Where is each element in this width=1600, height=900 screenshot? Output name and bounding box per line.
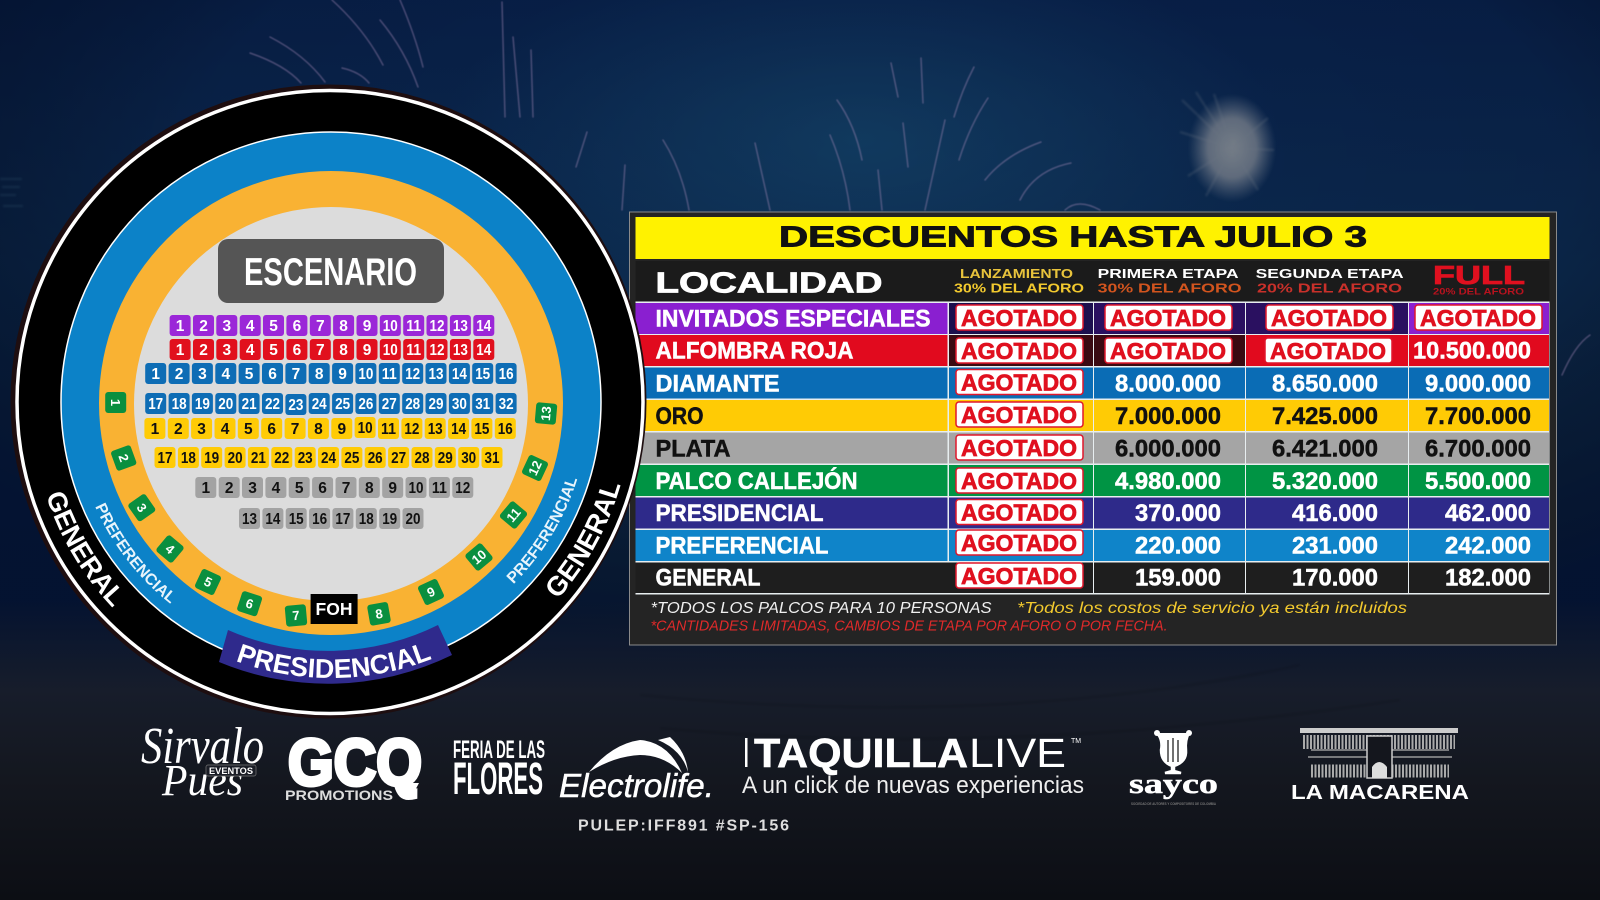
- sold out badges: AGOTADO: [1110, 338, 1226, 364]
- prices: segunda etapa: 6.421.000: [1272, 436, 1378, 462]
- seats: oro row 2: 17: [158, 450, 172, 467]
- seats: plata row 2: 20: [406, 511, 420, 528]
- seats: diamante row 2: 19: [195, 396, 210, 413]
- seats: diamante row 2: 26: [358, 396, 374, 413]
- seats: oro row 2: 20: [228, 450, 243, 467]
- seats: plata row 2: 14: [265, 511, 281, 528]
- seats: plata row 1: 3: [248, 480, 257, 497]
- sold out badges: AGOTADO: [1271, 305, 1387, 331]
- prices: primera etapa: 6.000.000: [1115, 436, 1221, 462]
- palcos: numbered green boxes: 10: [469, 547, 489, 567]
- palcos: numbered green boxes: 7: [292, 608, 300, 623]
- prices: segunda etapa: 5.320.000: [1272, 468, 1378, 495]
- header row: 20% DEL AFORO: [1433, 286, 1524, 296]
- sold out badges: AGOTADO: [961, 305, 1077, 331]
- ring: palco callejon: [99, 171, 563, 635]
- palcos: numbered green boxes: 8: [374, 606, 384, 622]
- seats: alfombra roja row: 8: [339, 342, 348, 359]
- header row: PRIMERA ETAPA: [1098, 266, 1239, 281]
- footnotes: [651, 600, 1407, 634]
- sold out badges: AGOTADO: [1270, 338, 1386, 364]
- sold out badges: AGOTADO: [961, 370, 1077, 396]
- prices: full: [1413, 338, 1531, 592]
- seats: diamante row 2: 29: [428, 396, 444, 413]
- logo: sayco: [1129, 730, 1218, 806]
- prices: segunda etapa: 8.650.000: [1272, 370, 1378, 398]
- seats: diamante row 1: [145, 363, 517, 384]
- seats: alfombra roja row: 12: [430, 342, 444, 359]
- seats: invitados especiales row: 7: [316, 318, 325, 335]
- seats: alfombra roja row: 4: [246, 342, 255, 359]
- palcos: numbered green boxes: 6: [244, 595, 255, 612]
- seats: diamante row 1: 10: [358, 366, 373, 383]
- logo: taquilla live: LIVE: [969, 730, 1066, 776]
- prices: segunda etapa: [1272, 370, 1378, 592]
- seats: oro row 2: 22: [274, 450, 289, 467]
- logo: gcq promotions: PROMOTIONS: [285, 787, 393, 803]
- seats: oro row 2: 29: [438, 450, 453, 467]
- logo: sirvalo pues eventos: Pues: [161, 756, 243, 805]
- seats: diamante row 1: 4: [221, 366, 230, 383]
- prices: primera etapa: 159.000: [1135, 565, 1221, 592]
- sold out badges: AGOTADO: [1110, 305, 1226, 331]
- seats: oro row 2: 23: [298, 450, 313, 467]
- seats: oro row 2: 27: [391, 450, 406, 467]
- panel: seating map: [10, 84, 674, 759]
- seats: oro row 1: 11: [381, 421, 396, 438]
- palcos: numbered green boxes: 5: [202, 574, 214, 590]
- table background: [630, 212, 1556, 645]
- prices: full: 6.700.000: [1425, 436, 1531, 462]
- seats: invitados especiales row: 3: [222, 318, 231, 335]
- seats: plata row 1: [195, 477, 473, 498]
- seats: alfombra roja row: 3: [222, 342, 231, 359]
- floor: gray centre: [134, 207, 528, 601]
- logo: sirvalo pues eventos: EVENTOS: [209, 766, 253, 776]
- logo: taquilla live: TAQUILLA: [754, 730, 968, 776]
- seats: alfombra roja row: 6: [293, 342, 302, 359]
- seats: diamante row 1: 11: [382, 366, 397, 383]
- label: general left: GENERAL: [48, 492, 120, 608]
- seats: oro row 1: 2: [174, 421, 183, 438]
- seats: alfombra roja row: 13: [453, 342, 468, 359]
- palcos: numbered green boxes: 3: [134, 500, 150, 515]
- logo: feria de las flores: [453, 736, 545, 804]
- seats: oro row 1: 3: [197, 421, 206, 438]
- seats: diamante row 2: 18: [172, 396, 187, 413]
- ring: outer edge: [10, 84, 646, 718]
- seats: diamante row 1: 12: [405, 366, 420, 383]
- row labels: DIAMANTE: [656, 370, 780, 398]
- banner: presidencial: [219, 625, 452, 684]
- seats: oro row 1: 8: [314, 421, 323, 438]
- row labels: INVITADOS ESPECIALES: [656, 306, 930, 333]
- seats: diamante row 1: 5: [245, 366, 254, 383]
- seats: diamante row 2: 21: [242, 396, 257, 413]
- seats: plata row 1: 2: [225, 480, 234, 497]
- seats: oro row 1: 5: [244, 421, 253, 438]
- prices: full: 182.000: [1445, 565, 1531, 592]
- row labels: PREFERENCIAL: [656, 532, 829, 560]
- sold out badges: AGOTADO: [961, 435, 1077, 461]
- prices: full: 7.700.000: [1425, 403, 1531, 430]
- ring: preferencial zone: [61, 132, 601, 672]
- seats: diamante row 1: 1: [151, 366, 160, 383]
- seats: diamante row 2: 31: [475, 396, 491, 413]
- header row: 30% DEL AFORO: [954, 281, 1084, 296]
- footnotes: *CANTIDADES LIMITADAS, CAMBIOS DE ETAPA POR AFORO O POR FECHA.: [651, 618, 1168, 634]
- row labels: [656, 306, 930, 592]
- seats: oro row 2: 28: [414, 450, 430, 467]
- seats: plata row 1: 11: [432, 480, 447, 497]
- seats: oro row 1: 9: [337, 421, 346, 438]
- seats: oro row 1: [144, 417, 516, 439]
- seats: invitados especiales row: 9: [363, 318, 372, 335]
- logo: electrolife: [559, 737, 714, 804]
- seats: oro row 2: 30: [461, 450, 476, 467]
- palcos: numbered green boxes: [105, 392, 557, 627]
- seats: plata row 1: 5: [295, 480, 304, 497]
- label: general right: GENERAL: [547, 484, 620, 596]
- seats: oro row 1: 13: [428, 421, 443, 438]
- heading: descuentos: [636, 217, 1550, 259]
- row labels: PALCO CALLEJÓN: [656, 467, 858, 495]
- header row: LOCALIDAD: [656, 268, 882, 300]
- logo: taquilla live: [742, 730, 1084, 799]
- seats: diamante row 2: 24: [312, 396, 327, 413]
- label: preferencial right: PREFERENCIAL: [506, 478, 578, 584]
- logo: sayco: SOCIEDAD DE AUTORES Y COMPOSITORES DE COLOMBIA: [1131, 802, 1216, 806]
- seats: diamante row 2: 28: [405, 396, 421, 413]
- seats: plata row 2: [239, 508, 424, 529]
- seats: invitados especiales row: 2: [199, 318, 208, 335]
- prices: primera etapa: 8.000.000: [1115, 370, 1221, 398]
- seats: diamante row 1: 6: [268, 366, 277, 383]
- seats: plata row 1: 7: [342, 480, 350, 497]
- footnotes: *TODOS LOS PALCOS PARA 10 PERSONAS: [651, 600, 992, 617]
- seats: diamante row 2: 23: [288, 397, 304, 414]
- seats: invitados especiales row: [170, 315, 494, 336]
- seats: plata row 1: 6: [318, 480, 327, 497]
- label: preferencial left: PREFERENCIAL: [96, 502, 173, 604]
- seats: diamante row 1: 15: [475, 366, 491, 383]
- seats: plata row 1: 8: [365, 480, 374, 497]
- banner: presidencial: PRESIDENCIAL: [237, 644, 432, 678]
- seats: alfombra roja row: 10: [383, 342, 398, 359]
- prices: full: 242.000: [1445, 532, 1531, 560]
- seats: diamante row 1: 13: [428, 366, 444, 383]
- seats: invitados especiales row: 6: [293, 318, 302, 335]
- logo: feria de las flores: FLORES: [453, 753, 543, 804]
- foh: front of house box: FOH: [316, 599, 352, 619]
- header row: 30% DEL AFORO: [1098, 281, 1242, 296]
- seats: invitados especiales row: 10: [383, 318, 398, 335]
- sold out badges: AGOTADO: [961, 530, 1077, 556]
- row labels: PLATA: [656, 436, 731, 462]
- seats: plata row 2: 18: [359, 511, 374, 528]
- seats: alfombra roja row: [170, 339, 494, 360]
- seats: alfombra roja row: 11: [406, 342, 422, 359]
- seats: diamante row 2: 30: [452, 396, 467, 413]
- seats: oro row 1: 1: [151, 421, 160, 438]
- seats: oro row 1: 7: [291, 421, 299, 438]
- seats: plata row 2: 17: [335, 511, 350, 528]
- seats: oro row 1: 12: [404, 421, 419, 438]
- logo: sirvalo pues eventos: [141, 718, 264, 805]
- seats: diamante row 2: 25: [335, 396, 350, 413]
- header row: FULL: [1433, 260, 1525, 290]
- footnotes: *Todos los costos de servicio ya están incluidos: [1017, 600, 1407, 617]
- seats: diamante row 1: 9: [338, 366, 347, 383]
- seats: alfombra roja row: 7: [316, 342, 325, 359]
- seats: invitados especiales row: 4: [246, 318, 255, 335]
- prices: segunda etapa: 416.000: [1292, 500, 1378, 527]
- palcos: numbered green boxes: 12: [525, 458, 545, 478]
- seats: oro row 2: 18: [181, 450, 196, 467]
- prices: full: 462.000: [1445, 500, 1531, 527]
- sold out badges: AGOTADO: [961, 468, 1077, 494]
- ring: general zone: [17, 90, 643, 714]
- prices: primera etapa: [1115, 370, 1221, 592]
- row labels: ORO: [656, 403, 704, 430]
- seats: invitados especiales row: 8: [339, 318, 348, 335]
- sold out badges: AGOTADO: [1420, 305, 1536, 331]
- seats: plata row 1: 1: [201, 480, 210, 497]
- seats: alfombra roja row: 2: [199, 342, 208, 359]
- seats: diamante row 2: 20: [218, 396, 233, 413]
- seats: plata row 1: 10: [408, 480, 424, 497]
- seats: diamante row 1: 3: [198, 366, 207, 383]
- seats: plata row 1: 12: [455, 480, 470, 497]
- prices: full: 9.000.000: [1425, 370, 1531, 398]
- prices: full: 10.500.000: [1413, 338, 1531, 364]
- seats: alfombra roja row: 9: [363, 342, 372, 359]
- seats: diamante row 2: 27: [382, 396, 397, 413]
- seats: plata row 2: 13: [242, 511, 257, 528]
- prices: segunda etapa: 231.000: [1292, 532, 1378, 560]
- seats: oro row 2: 26: [368, 450, 383, 467]
- logo: sirvalo pues eventos: Sirvalo: [141, 718, 264, 775]
- seats: invitados especiales row: 5: [269, 318, 278, 335]
- header row: 20% DEL AFORO: [1257, 281, 1402, 296]
- seats: diamante row 2: 22: [265, 396, 280, 413]
- sold out badges: AGOTADO: [961, 402, 1077, 428]
- logo: sayco: sayco: [1129, 768, 1218, 800]
- seats: oro row 1: 14: [451, 421, 466, 438]
- seats: diamante row 1: 7: [292, 366, 300, 383]
- logo: taquilla live: TM: [1071, 738, 1081, 745]
- palcos: numbered green boxes: 9: [425, 584, 437, 600]
- seats: oro row 1: 4: [221, 421, 230, 438]
- panel: price table: [630, 212, 1556, 645]
- seats: invitados especiales row: 13: [453, 318, 468, 335]
- row labels: GENERAL: [656, 565, 761, 592]
- sold out badges: [956, 305, 1542, 589]
- logo: taquilla live: A un click de nuevas experiencias: [742, 772, 1084, 799]
- seats: diamante row 2: 17: [148, 396, 163, 413]
- seats: oro row 2: 31: [484, 450, 500, 467]
- prices: segunda etapa: 7.425.000: [1272, 403, 1378, 430]
- row labels: PRESIDENCIAL: [656, 500, 824, 527]
- seats: alfombra roja row: 1: [176, 342, 185, 359]
- prices: primera etapa: 220.000: [1135, 532, 1221, 560]
- seats: diamante row 1: 8: [315, 366, 324, 383]
- prices: full: 5.500.000: [1425, 468, 1531, 495]
- header row: LANZAMIENTO: [960, 266, 1073, 281]
- seats: diamante row 1: 14: [452, 366, 467, 383]
- seats: plata row 1: 4: [272, 480, 281, 497]
- sold out badges: AGOTADO: [961, 338, 1077, 364]
- seats: oro row 2: 19: [204, 450, 220, 467]
- stage: escenario: ESCENARIO: [244, 251, 417, 294]
- seats: invitados especiales row: 12: [430, 318, 444, 335]
- palcos: numbered green boxes: 2: [115, 452, 132, 464]
- seats: diamante row 1: 16: [499, 366, 514, 383]
- seats: plata row 2: 15: [289, 511, 304, 528]
- seats: invitados especiales row: 1: [176, 318, 185, 335]
- palcos: numbered green boxes: 11: [503, 505, 524, 525]
- logo: la macarena: [1291, 728, 1469, 804]
- seats: diamante row 1: 2: [175, 366, 183, 383]
- header row: [636, 260, 1550, 301]
- logo: la macarena: LA MACARENA: [1291, 782, 1469, 804]
- seats: oro row 1: 6: [267, 421, 276, 438]
- prices: primera etapa: 7.000.000: [1115, 403, 1221, 430]
- seats: diamante row 2: [145, 393, 517, 415]
- palcos: numbered green boxes: 4: [162, 541, 178, 558]
- prices: segunda etapa: 170.000: [1292, 565, 1378, 592]
- seats: oro row 1: 15: [474, 421, 490, 438]
- logo: gcq promotions: GCQ: [288, 725, 422, 799]
- heading: descuentos: DESCUENTOS HASTA JULIO 3: [779, 222, 1367, 254]
- seats: plata row 2: 16: [312, 511, 327, 528]
- seats: oro row 2: [154, 447, 502, 468]
- seats: alfombra roja row: 14: [476, 342, 492, 359]
- prices: primera etapa: 4.980.000: [1115, 468, 1221, 495]
- header row: SEGUNDA ETAPA: [1256, 266, 1404, 281]
- sold out badges: AGOTADO: [961, 563, 1077, 589]
- seats: plata row 1: 9: [388, 480, 397, 497]
- sold out badges: AGOTADO: [961, 500, 1077, 526]
- seats: diamante row 2: 32: [499, 396, 514, 413]
- row labels: ALFOMBRA ROJA: [656, 338, 854, 364]
- seats: oro row 2: 21: [251, 450, 266, 467]
- seats: oro row 1: 10: [358, 420, 373, 437]
- seats: oro row 1: 16: [498, 421, 513, 438]
- pulep code: PULEP:IFF891 #SP-156: [578, 818, 789, 834]
- palcos: numbered green boxes: 1: [108, 399, 123, 406]
- logo: feria de las flores: FERIA DE LAS: [453, 736, 545, 764]
- foh: front of house box: [311, 594, 358, 624]
- prices: primera etapa: 370.000: [1135, 500, 1221, 527]
- seats: invitados especiales row: 14: [476, 318, 492, 335]
- seats: oro row 2: 24: [321, 450, 336, 467]
- seats: alfombra roja row: 5: [269, 342, 278, 359]
- palcos: numbered green boxes: 13: [538, 406, 554, 421]
- row fills: [636, 302, 1550, 594]
- seats: invitados especiales row: 11: [406, 318, 422, 335]
- logo: electrolife: Electrolife.: [559, 767, 714, 804]
- seats: oro row 2: 25: [344, 450, 360, 467]
- stage: escenario: [218, 239, 444, 303]
- seats: plata row 2: 19: [382, 511, 398, 528]
